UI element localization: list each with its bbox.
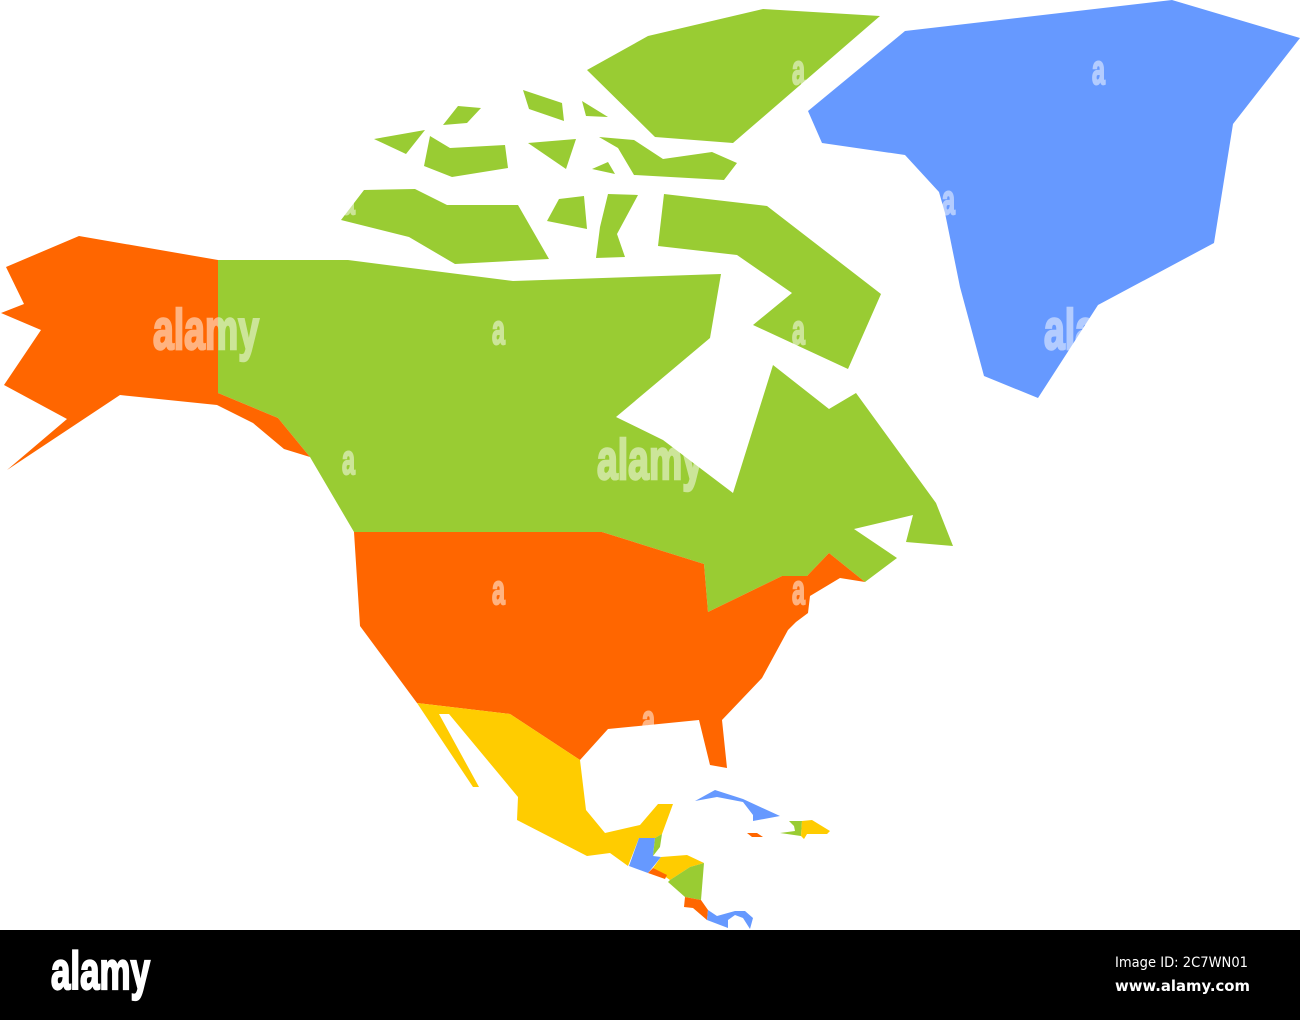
image id: Image ID: 2C7WN01: [1115, 955, 1248, 971]
mainland Canada: [218, 260, 953, 612]
watermark: centre logo: alamy: [597, 428, 703, 492]
watermark letters: [342, 46, 1105, 743]
island: Ellesmere: [587, 9, 880, 143]
watermark letters: a: [342, 176, 355, 223]
island: Cornwallis: [592, 162, 615, 174]
watermark letters: a: [342, 436, 355, 483]
watermark: left logo: alamy: [153, 298, 259, 362]
country: Dominican Republic: [801, 820, 830, 839]
country: Cuba: [695, 790, 780, 821]
island: Baffin: [658, 194, 881, 369]
footer bar: [0, 930, 1300, 1020]
island: Devon: [599, 137, 737, 180]
country: Honduras: [653, 855, 704, 880]
country: Panama: [707, 910, 753, 929]
watermark letters: a: [1092, 46, 1105, 93]
watermark letters: a: [792, 566, 805, 613]
watermark letters: a: [792, 46, 805, 93]
website: www.alamy.com: [1115, 977, 1250, 995]
island: Banks area small: [443, 106, 481, 125]
watermark letters: a: [792, 306, 805, 353]
island: Banks: [374, 130, 425, 154]
country: Guatemala: [629, 838, 661, 873]
country: Mexico: [417, 703, 673, 866]
island: Somerset: [596, 194, 638, 258]
island: Victoria: [341, 189, 549, 264]
watermark letters: a: [642, 696, 655, 743]
Alaska: [1, 236, 310, 470]
country: Nicaragua: [668, 863, 704, 900]
watermark letters: a: [492, 566, 505, 613]
country: Canada: [218, 9, 953, 612]
contiguous states: [354, 532, 865, 768]
watermark letters: a: [492, 306, 505, 353]
island: Prince of Wales: [547, 196, 587, 229]
island: Melville: [424, 136, 508, 177]
island: Bathurst: [528, 139, 576, 169]
country: Greenland: [808, 0, 1300, 398]
watermark: Greenland logo: alamy: [1044, 298, 1150, 362]
country: Haiti: [780, 821, 802, 836]
footer logo: alamy: [51, 942, 150, 1001]
country: El Salvador: [648, 868, 667, 879]
country: Belize: [653, 834, 662, 856]
country: Jamaica: [747, 833, 763, 837]
island: Amund Ringnes: [582, 101, 608, 117]
watermarks: [153, 46, 1150, 743]
country: Costa Rica: [684, 897, 708, 920]
watermark letters: a: [942, 176, 955, 223]
island: Ellef Ringnes: [523, 90, 564, 121]
country: United States: [1, 236, 865, 768]
